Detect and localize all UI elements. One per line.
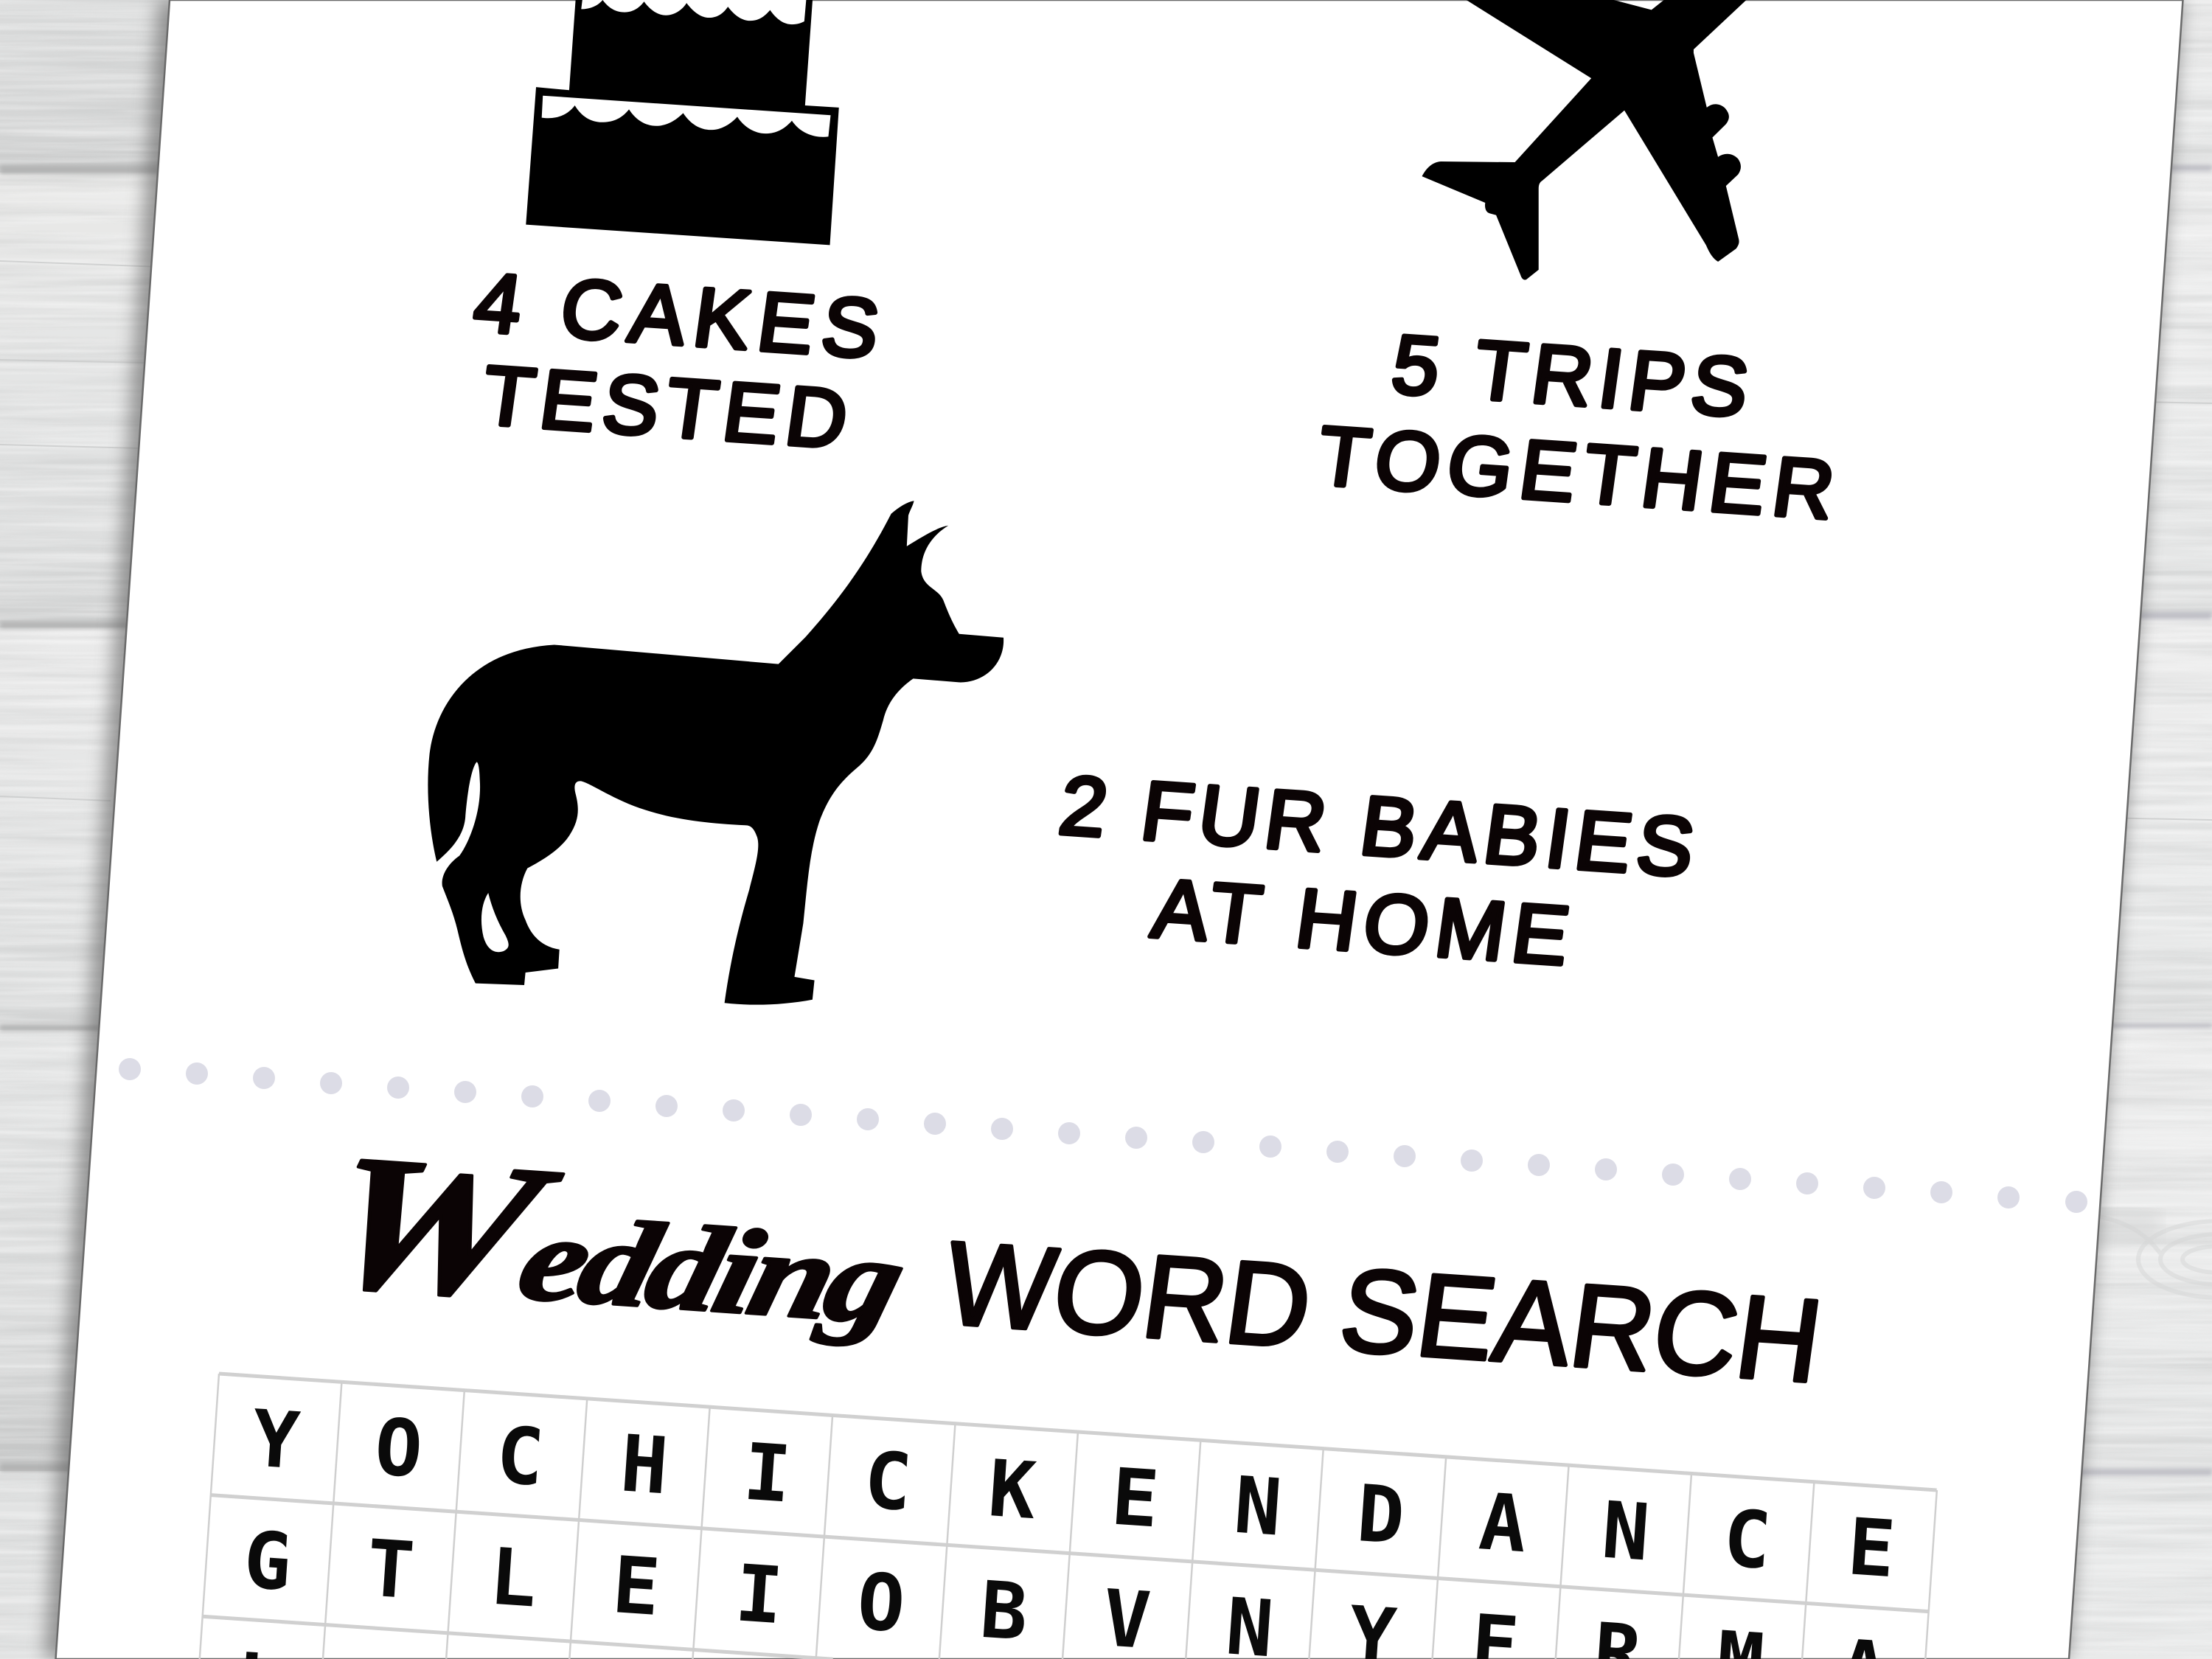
row 1 letters: A: [1476, 1476, 1529, 1570]
row 1 letters: D: [1354, 1468, 1408, 1562]
word: WORD SEARCH: WORD SEARCH: [937, 1217, 1829, 1407]
caption: 4 cakes tested: [469, 256, 885, 465]
caption: 5 trips together: TOGETHER: [1312, 409, 1840, 536]
row 1 letters: O: [372, 1402, 425, 1495]
caption: 2 fur babies at home: [1054, 759, 1700, 982]
seam: right: [1954, 165, 2212, 1475]
top tier icing: [581, 0, 806, 24]
word search grid: [195, 1374, 1937, 1659]
caption: 5 trips together: [1312, 318, 1840, 536]
row 1 letters: [249, 1393, 1898, 1595]
script word: Wedding: Wedding: [303, 1113, 930, 1364]
grid lines: [200, 1374, 1937, 1659]
row 2 letters: I: [732, 1548, 785, 1641]
row 1 letters: E: [1108, 1451, 1161, 1545]
caption: 4 cakes tested: TESTED: [477, 349, 853, 465]
caption: 2 fur babies at home: AT HOME: [1147, 862, 1575, 982]
row 1 letters: C: [493, 1410, 546, 1503]
row 1 letters: K: [986, 1443, 1039, 1537]
cake silhouette: [526, 0, 839, 245]
dotted divider: [119, 1058, 2087, 1213]
icon: wedding cake: [526, 0, 839, 245]
caption: 5 trips together: 5 TRIPS: [1387, 318, 1754, 434]
row 1 letters: I: [741, 1427, 794, 1520]
seam: left: [0, 165, 295, 1472]
caption: 4 cakes tested: 4 CAKES: [469, 256, 885, 375]
row 1 letters: N: [1231, 1460, 1284, 1554]
row 2 letters: [241, 1514, 1890, 1659]
caption: 2 fur babies at home: 2 FUR BABIES: [1054, 759, 1700, 894]
row 1 letters: N: [1599, 1485, 1652, 1579]
row 1 letters: H: [618, 1418, 671, 1512]
row 2 letters: G: [241, 1514, 294, 1608]
heading: wedding word search: [303, 1113, 1829, 1407]
row 1 letters: Y: [249, 1393, 302, 1486]
row 2 letters: O: [855, 1556, 908, 1649]
wood knot: [2006, 1209, 2212, 1298]
row 1 letters: C: [1721, 1493, 1774, 1587]
icon: airplane: [1422, 0, 1746, 279]
row 1 letters: C: [861, 1435, 914, 1528]
row 2 letters: B: [978, 1565, 1031, 1658]
row 2 letters: E: [610, 1540, 663, 1633]
row 2 letters: T: [364, 1523, 417, 1616]
row 1 letters: E: [1845, 1501, 1898, 1595]
row 2 letters: L: [487, 1531, 540, 1625]
wood fine grain lines: [0, 261, 2212, 820]
icon: dog: [428, 501, 1004, 1005]
bottom tier icing: [542, 96, 831, 137]
